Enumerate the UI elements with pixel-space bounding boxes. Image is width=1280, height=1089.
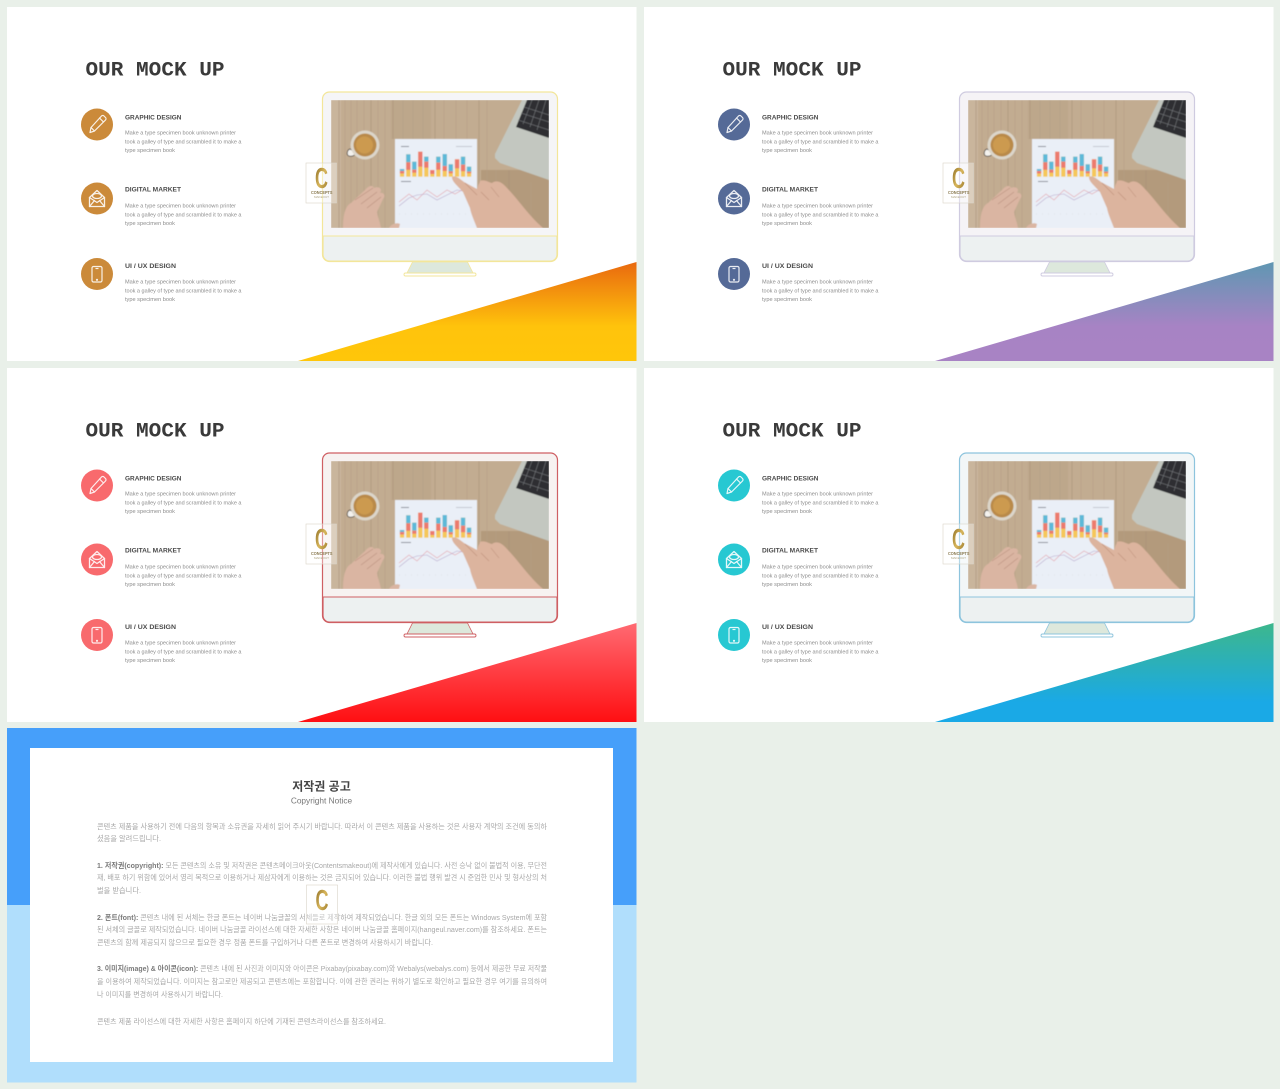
paragraph: image and icon: 나 이미지를 변경하여 사용하시기 바랍니다. xyxy=(97,989,223,999)
title: OUR MOCK UP xyxy=(722,420,862,444)
item text: type specimen book xyxy=(125,509,175,515)
paragraph: image and icon xyxy=(97,963,547,999)
item text: Make a type specimen book unknown printer xyxy=(125,280,236,286)
panel: slide 3 red xyxy=(7,368,636,722)
icon: pencil xyxy=(718,108,750,140)
paragraph: font: 콘텐츠의 함께 제공되지 않으므로 필요한 경우 정품 폰트를 구입하거나 다른 폰트로 변경하여 사용하시기 바랍니다. xyxy=(97,937,433,947)
paragraph: font: 된 서체의 글꼴로 제작되었습니다. 네이버 나눔글꼴 라이선스에 대한 자세한 사항은 네이버 나눔글꼴 홈페이지(hangeul.naver.com)를 참조하세요. 폰트는 xyxy=(97,924,547,934)
watermark logo: CONCEPTS xyxy=(948,551,970,556)
accent triangle xyxy=(935,623,1274,722)
monitor mockup xyxy=(960,92,1194,276)
item text: Make a type specimen book unknown printer xyxy=(762,641,873,647)
monitor mockup xyxy=(960,453,1194,637)
item text: Make a type specimen book unknown printer xyxy=(762,204,873,210)
item text: Make a type specimen book unknown printer xyxy=(125,204,236,210)
watermark logo xyxy=(306,885,338,924)
item text: DIGITAL MARKET xyxy=(125,186,181,194)
icon: envelope xyxy=(718,544,750,576)
icon: pencil xyxy=(81,108,113,140)
item text: type specimen book xyxy=(762,297,812,303)
item text: type specimen book xyxy=(125,148,175,154)
item text: GRAPHIC DESIGN xyxy=(762,114,819,122)
item: digital market xyxy=(718,182,879,227)
item: digital market xyxy=(81,544,242,588)
notice heading xyxy=(291,778,353,806)
watermark logo: MAKEOUT xyxy=(951,556,966,560)
photo: desk with chart xyxy=(331,461,549,589)
watermark logo: C xyxy=(952,524,965,556)
icon: pencil xyxy=(81,470,113,502)
blue background upper xyxy=(7,728,636,905)
paragraph: image and icon: 3. 이미지(image) & 아이콘(icon): 콘텐츠 내에 된 사진과 이미지와 아이콘은 Pixabay(pixabay.com)와 Webalys(webalys.com) 등에서 제공한 무료 저작물 xyxy=(97,963,547,973)
item text: took a galley of type and scrambled it to make a xyxy=(762,213,879,219)
paragraph: copyright: 재, 배포 하기 위함에 있어서 영리 목적으로 이용하거나 제삼자에게 이용하는 것은 금지되어 있습니다. 이러한 불법 행위 발견 시 준엄한 민사 및 형사상의 처 xyxy=(97,872,547,882)
watermark logo: MAKEOUT xyxy=(951,195,966,199)
item text: Make a type specimen book unknown printer xyxy=(762,565,873,571)
slide background xyxy=(644,368,1274,722)
panel: slide 2 slate xyxy=(644,7,1274,361)
item text xyxy=(125,476,242,515)
item text: DIGITAL MARKET xyxy=(762,186,818,194)
watermark logo: MAKEOUT xyxy=(314,556,329,560)
item text xyxy=(125,186,242,227)
item text: GRAPHIC DESIGN xyxy=(125,114,182,122)
item: graphic design xyxy=(718,470,879,515)
item text: took a galley of type and scrambled it to make a xyxy=(125,140,242,146)
item: digital market xyxy=(81,182,242,227)
intro paragraph: 콘텐츠 제품을 사용하기 전에 다음의 항목과 소유권을 자세히 읽어 주시기 바랍니다. 따라서 이 콘텐츠 제품을 사용하는 것은 사용자 계약의 조건에 동의하 xyxy=(97,821,547,831)
item text: Make a type specimen book unknown printer xyxy=(125,492,236,498)
paragraph: copyright: 벌을 받습니다. xyxy=(97,885,141,895)
watermark logo: C xyxy=(316,885,329,917)
item text: type specimen book xyxy=(125,582,175,588)
photo: desk with chart xyxy=(968,100,1186,228)
item text: type specimen book xyxy=(762,582,812,588)
item text: took a galley of type and scrambled it to make a xyxy=(762,501,879,507)
slide background xyxy=(7,7,636,361)
item text xyxy=(762,114,879,154)
watermark logo xyxy=(306,524,336,564)
intro paragraph xyxy=(97,821,547,843)
blue background lower xyxy=(7,905,636,1082)
paragraph: font xyxy=(97,912,547,947)
title: OUR MOCK UP xyxy=(722,60,862,82)
item text: took a galley of type and scrambled it to make a xyxy=(762,574,879,580)
item text: took a galley of type and scrambled it to make a xyxy=(125,650,242,656)
item text: UI / UX DESIGN xyxy=(125,263,176,270)
paragraph: font: 2. 폰트(font): 콘텐츠 내에 된 서체는 한글 폰트는 네이버 나눔글꼴의 서체들로 제작하여 제작되었습니다. 한글 외의 모든 폰트는 Windows System에 포함 xyxy=(97,912,547,922)
watermark logo xyxy=(306,163,336,203)
item: ui ux design xyxy=(81,258,242,303)
icon: envelope xyxy=(81,182,113,214)
item text: took a galley of type and scrambled it to make a xyxy=(125,574,242,580)
item: graphic design xyxy=(718,108,879,154)
panel: copyright notice xyxy=(7,728,636,1082)
item text xyxy=(762,548,879,588)
white card xyxy=(30,748,613,1062)
watermark logo: C xyxy=(952,163,965,195)
item text xyxy=(762,263,879,303)
icon: phone xyxy=(81,258,113,290)
item text xyxy=(762,624,879,664)
item text xyxy=(762,186,879,227)
panel: slide 1 amber xyxy=(7,7,636,361)
paragraph: image and icon: 을 이용하여 제작되었습니다. 이미지는 참고로만 제공되고 콘텐츠에는 포함합니다. 이에 관한 권리는 위하기 별도로 확인하고 필요한 경우 여기를 유의하여 xyxy=(97,976,547,986)
item: ui ux design xyxy=(81,619,242,664)
watermark logo xyxy=(943,163,974,203)
item: graphic design xyxy=(81,470,242,515)
panel: slide 4 teal xyxy=(644,368,1274,722)
paragraph: copyright: 1. 저작권(copyright): 모든 콘텐츠의 소유 및 저작권은 콘텐츠메이크아웃(Contentsmakeout)에 제작사에게 있습니다. 사전 승낙 없이 불법적 이용, 무단전 xyxy=(97,860,547,870)
item text: type specimen book xyxy=(125,297,175,303)
item text: GRAPHIC DESIGN xyxy=(762,476,819,482)
item text: took a galley of type and scrambled it to make a xyxy=(762,650,879,656)
title: OUR MOCK UP xyxy=(86,60,224,82)
item text xyxy=(125,624,242,664)
item text xyxy=(762,476,879,515)
item text: Make a type specimen book unknown printer xyxy=(762,280,873,286)
intro paragraph: 셨음을 알려드립니다. xyxy=(97,833,161,843)
item text: type specimen book xyxy=(762,658,812,664)
watermark logo: CONCEPTS xyxy=(948,190,970,195)
icon: phone xyxy=(81,619,113,651)
watermark logo: C xyxy=(315,163,328,195)
icon: phone xyxy=(718,619,750,651)
item text: DIGITAL MARKET xyxy=(125,548,181,554)
watermark logo xyxy=(943,524,974,564)
title: OUR MOCK UP xyxy=(86,420,224,444)
notice heading: Copyright Notice xyxy=(291,796,353,806)
item text: Make a type specimen book unknown printer xyxy=(762,492,873,498)
slide background xyxy=(644,7,1274,361)
item text xyxy=(125,114,242,154)
watermark logo: MAKEOUT xyxy=(314,195,329,199)
item text: Make a type specimen book unknown printer xyxy=(762,131,873,137)
item text: took a galley of type and scrambled it to make a xyxy=(125,289,242,295)
item text: UI / UX DESIGN xyxy=(125,624,176,631)
item text: Make a type specimen book unknown printer xyxy=(125,641,236,647)
icon: phone xyxy=(718,258,750,290)
icon: envelope xyxy=(81,544,113,576)
item text: type specimen book xyxy=(762,221,812,227)
item text: UI / UX DESIGN xyxy=(762,263,813,270)
accent triangle xyxy=(298,623,636,722)
item: ui ux design xyxy=(718,619,879,664)
item text: type specimen book xyxy=(125,221,175,227)
item text: Make a type specimen book unknown printer xyxy=(125,131,236,137)
item text xyxy=(125,263,242,303)
watermark logo: CONCEPTS xyxy=(311,190,332,195)
item: graphic design xyxy=(81,108,242,154)
item text: Make a type specimen book unknown printer xyxy=(125,565,236,571)
item text: took a galley of type and scrambled it to make a xyxy=(125,501,242,507)
slide background xyxy=(7,368,636,722)
watermark logo: C xyxy=(315,524,328,556)
watermark logo: CONCEPTS xyxy=(311,551,332,556)
accent triangle xyxy=(935,262,1274,361)
item text: took a galley of type and scrambled it to make a xyxy=(762,289,879,295)
item text: GRAPHIC DESIGN xyxy=(125,476,182,482)
item text: type specimen book xyxy=(762,509,812,515)
photo: desk with chart xyxy=(968,461,1186,589)
item text xyxy=(125,548,242,588)
notice heading: 저작권 공고 xyxy=(292,778,351,794)
item text: type specimen book xyxy=(762,148,812,154)
item text: type specimen book xyxy=(125,658,175,664)
item: ui ux design xyxy=(718,258,879,303)
icon: envelope xyxy=(718,182,750,214)
item text: UI / UX DESIGN xyxy=(762,624,813,631)
photo: desk with chart xyxy=(331,100,549,228)
item text: took a galley of type and scrambled it to make a xyxy=(125,213,242,219)
item text: took a galley of type and scrambled it to make a xyxy=(762,140,879,146)
accent triangle xyxy=(298,262,636,361)
paragraph: copyright xyxy=(97,860,547,895)
item text: DIGITAL MARKET xyxy=(762,548,818,554)
monitor mockup xyxy=(322,453,558,637)
item: digital market xyxy=(718,544,879,588)
closing line: 콘텐츠 제품 라이선스에 대한 자세한 사항은 홈페이지 하단에 기재된 콘텐츠라이선스를 참조하세요. xyxy=(97,1016,386,1026)
monitor mockup xyxy=(322,92,558,276)
icon: pencil xyxy=(718,470,750,502)
